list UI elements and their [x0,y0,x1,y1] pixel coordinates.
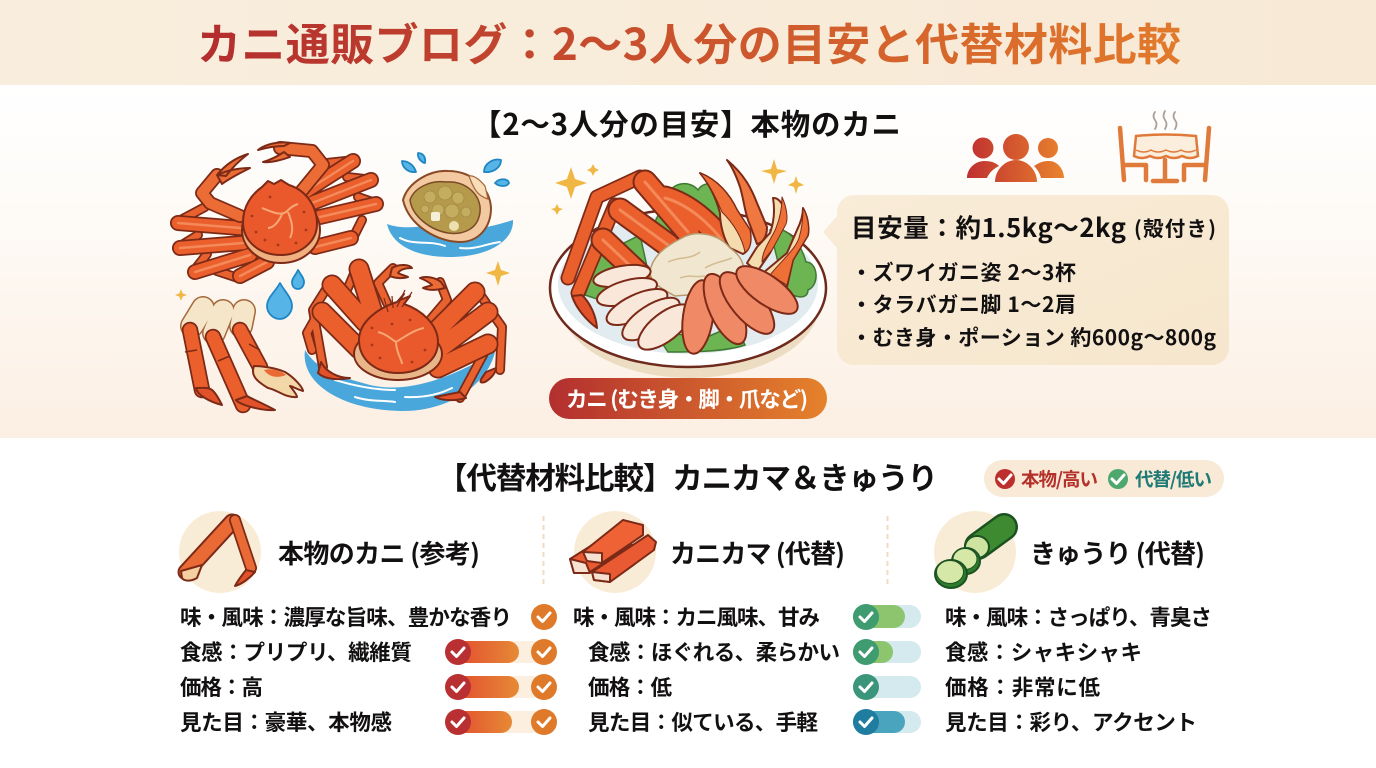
row: taste: 味・風味：さっぱり、青臭さ [945,601,1212,632]
row: appearance: 見た目：似ている、手軽 [588,706,818,737]
icon: dining table with steam [1120,111,1209,181]
meat slices left [592,261,699,358]
legend: 本物/高い [1021,466,1098,492]
row: taste: 味・風味：カニ風味、甘み [573,601,820,632]
row: price: 価格：非常に低 [945,671,1100,702]
illustration: crab platter [550,159,826,378]
row: appearance: 見た目：彩り、アクセント [945,706,1197,737]
icon: crab leg [179,511,261,593]
amount headline: 目安量：約1.5kg〜2kg [851,208,1126,245]
icon: kanikama sticks [570,511,656,593]
list item 1: ・ズワイガニ姿 2〜3杯 [851,257,1076,287]
claws [700,160,808,287]
illustration: crab legs [185,308,303,410]
column: cucumber [934,511,1212,737]
title band [0,0,1376,85]
column: real crab [179,511,557,737]
heading: カニカマ (代替) [670,534,845,571]
row: texture: 食感：プリプリ、繊維質 [180,636,412,667]
callout: serving amount [823,195,1229,365]
shell note: (殻付き) [1134,212,1216,242]
lettuce [585,184,816,352]
row: price: 価格：低 [588,671,672,702]
panel: real crab serving guide [175,102,1229,419]
legend [984,460,1224,497]
row: appearance [588,706,921,737]
label pill: crab: カニ (むき身・脚・爪など) [566,383,808,414]
title: カニ通販ブログ：2〜3人分の目安と代替材料比較 [197,9,1181,73]
icon: three people [967,134,1064,182]
sparkles [551,159,804,215]
heading: serving guide: 【2〜3人分の目安】本物のカニ [472,102,901,144]
heading: 本物のカニ (参考) [278,534,480,571]
illustration: hairy crab in water [305,265,502,411]
divider [544,516,888,586]
panel: substitute comparison [179,454,1224,737]
legs [568,177,722,293]
row: price: 価格：高 [180,671,263,702]
row: texture [180,636,557,667]
illustration: crab miso in shell [387,171,513,257]
list item 2: ・タラバガニ脚 1〜2肩 [851,289,1076,319]
page background [0,85,1376,438]
crab meat [650,234,744,296]
icons: water drops [267,153,509,319]
row: price [588,671,921,702]
meat slices right [678,257,805,356]
row: taste: 味・風味：濃厚な旨味、豊かな香り [180,601,512,632]
row: price [180,671,557,702]
icons: left sparkles [175,261,510,301]
row: appearance [180,706,557,737]
heading: きゅうり (代替) [1030,534,1205,571]
list item 3: ・むき身・ポーション 約600g〜800g [851,322,1216,352]
illustration: snow crab [175,142,378,278]
row: texture: 食感：ほぐれる、柔らかい [588,636,840,667]
legend: 代替/低い [1135,466,1212,492]
label pill: crab [549,378,827,419]
row: appearance: 見た目：豪華、本物感 [180,706,392,737]
heading: comparison: 【代替材料比較】カニカマ＆きゅうり [437,454,938,498]
icon: cucumber [934,511,1016,593]
column: kanikama [570,511,921,737]
row: texture: 食感：シャキシャキ [945,636,1142,667]
